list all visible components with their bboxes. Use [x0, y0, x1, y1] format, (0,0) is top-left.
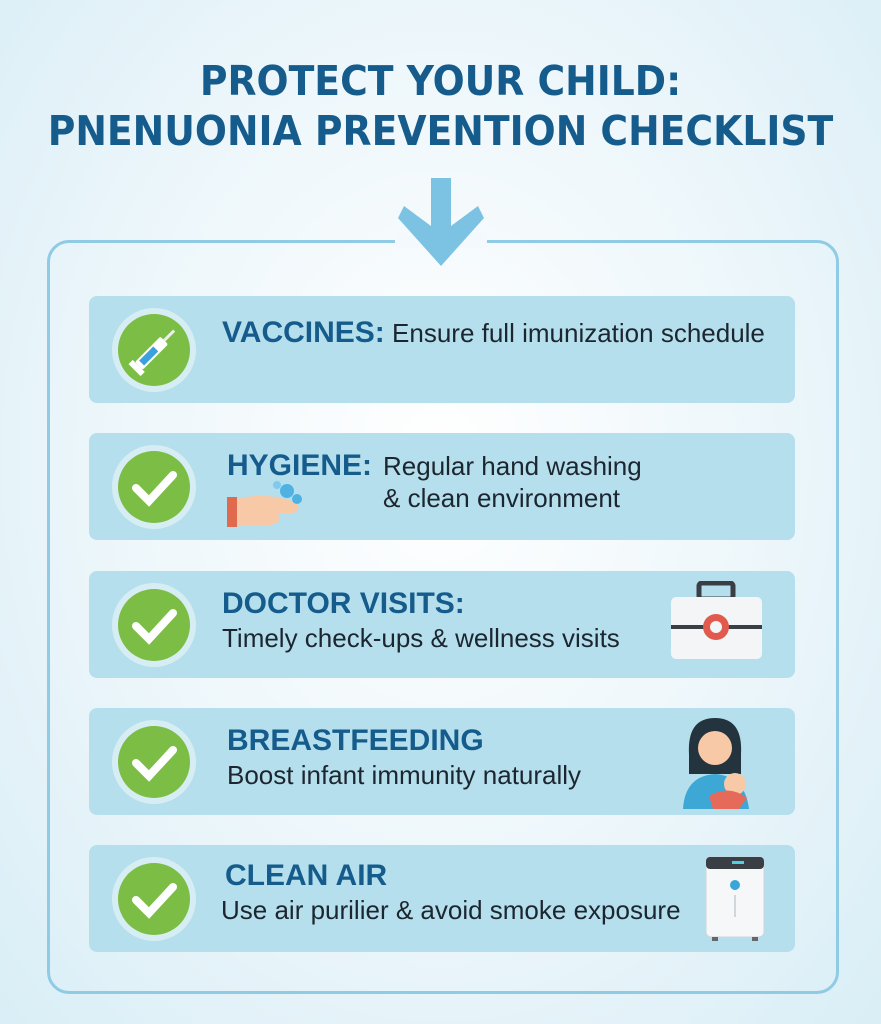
icon: mother and baby — [683, 718, 749, 809]
text: VACCINES: Ensure full imunization schedule — [222, 316, 765, 349]
heading: DOCTOR VISITS: — [222, 587, 465, 620]
check icon — [112, 720, 196, 804]
text — [383, 451, 642, 513]
check icon — [112, 583, 196, 667]
heading: CLEAN AIR — [225, 859, 387, 892]
row: vaccines — [89, 296, 795, 403]
text: Timely check-ups & wellness visits — [222, 623, 620, 653]
icon: air purifier — [706, 856, 764, 941]
icon: syringe — [112, 308, 196, 392]
check icon — [112, 857, 196, 941]
arrow — [398, 178, 484, 266]
row: breastfeeding — [89, 708, 795, 815]
text: Regular hand washing — [383, 451, 642, 481]
heading: BREASTFEEDING — [227, 724, 484, 757]
row: hygiene — [89, 433, 795, 540]
row: clean air — [89, 845, 795, 952]
row: doctor visits — [89, 571, 795, 678]
title: PNENUONIA PREVENTION CHECKLIST — [48, 107, 833, 155]
frame — [47, 240, 839, 994]
icon: medical kit — [671, 581, 762, 659]
text: Use air purilier & avoid smoke exposure — [221, 895, 681, 925]
heading: HYGIENE: — [227, 449, 372, 482]
title — [48, 57, 834, 155]
text: Boost infant immunity naturally — [227, 760, 581, 790]
icon: hand — [227, 481, 302, 527]
text: & clean environment — [383, 483, 620, 513]
title: PROTECT YOUR CHILD: — [200, 57, 681, 105]
check icon — [112, 445, 196, 529]
